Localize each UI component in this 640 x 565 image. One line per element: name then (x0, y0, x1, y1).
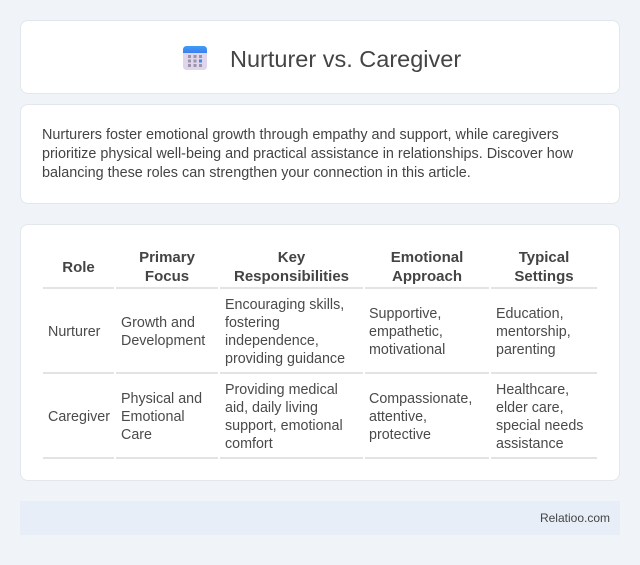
row: Nurturer approach (369, 306, 445, 358)
row: Caregiver approach: attentive, (369, 409, 427, 425)
row: Caregiver settings: elder care, (496, 400, 564, 416)
header: Primary Focus (139, 249, 195, 285)
header: Role: Role (62, 259, 95, 276)
footer (20, 501, 620, 535)
header: Emotional Approach: Emotional (391, 249, 463, 266)
row: Caregiver approach: Compassionate, (369, 391, 472, 407)
row: Nurturer settings: Education, (496, 306, 564, 322)
header: Primary Focus: Primary (139, 249, 195, 266)
row: Caregiver approach: protective (369, 427, 431, 443)
row: Nurturer focus: Growth and (121, 315, 195, 331)
intro text (42, 127, 574, 181)
row: Nurturer settings: parenting (496, 342, 556, 358)
row: Nurturer responsibilities (225, 297, 345, 367)
intro text: balancing these roles can strengthen your connection in this article. (42, 165, 471, 181)
header: Key Responsibilities: Key (278, 249, 305, 266)
row: Caregiver focus (121, 391, 202, 443)
intro text: Nurturers foster emotional growth through empathy and support, while caregivers (42, 127, 559, 143)
row: Nurturer role: Nurturer (48, 324, 100, 340)
row: Nurturer approach: empathetic, (369, 324, 443, 340)
header: Emotional Approach: Approach (392, 268, 462, 285)
row: Caregiver settings (496, 382, 583, 452)
row: Caregiver settings: special needs (496, 418, 583, 434)
row: Caregiver settings: assistance (496, 436, 564, 452)
row: Caregiver focus: Care (121, 427, 152, 443)
row: Nurturer approach: Supportive, (369, 306, 441, 322)
title panel (20, 20, 620, 94)
header: Primary Focus: Focus (145, 268, 189, 285)
intro panel (20, 104, 620, 204)
row: Nurturer responsibilities: Encouraging skills, (225, 297, 344, 313)
table panel (20, 224, 620, 481)
row: Caregiver role: Caregiver (48, 409, 110, 425)
row: Caregiver approach (369, 391, 472, 443)
row: Caregiver responsibilities: comfort (225, 436, 273, 452)
row: Caregiver focus: Physical and (121, 391, 202, 407)
icon: calendar (183, 46, 207, 70)
row: Nurturer responsibilities: fostering (225, 315, 280, 331)
footer text: Relatioo.com (540, 511, 610, 525)
header: Key Responsibilities (234, 249, 349, 285)
row: Caregiver responsibilities (225, 382, 343, 452)
row: Nurturer focus: Development (121, 333, 205, 349)
row: Nurturer settings (496, 306, 571, 358)
header: Typical Settings (514, 249, 574, 285)
row: Caregiver focus: Emotional (121, 409, 185, 425)
row: Nurturer responsibilities: independence, (225, 333, 319, 349)
row: Caregiver responsibilities: Providing medical (225, 382, 338, 398)
row: Nurturer responsibilities: providing guidance (225, 351, 345, 367)
row: Caregiver settings: Healthcare, (496, 382, 569, 398)
header: Key Responsibilities: Responsibilities (234, 268, 349, 285)
header: Emotional Approach (391, 249, 463, 285)
row: Caregiver responsibilities: support, emotional (225, 418, 343, 434)
row: Caregiver responsibilities: aid, daily living (225, 400, 318, 416)
row: Nurturer settings: mentorship, (496, 324, 571, 340)
header: Typical Settings: Settings (514, 268, 574, 285)
row: Nurturer focus (121, 315, 206, 349)
title: Nurturer vs. Caregiver (230, 46, 461, 72)
intro text: prioritize physical well-being and practical assistance in relationships. Discover how (42, 146, 573, 162)
row: Nurturer approach: motivational (369, 342, 445, 358)
header: Typical Settings: Typical (519, 249, 569, 266)
